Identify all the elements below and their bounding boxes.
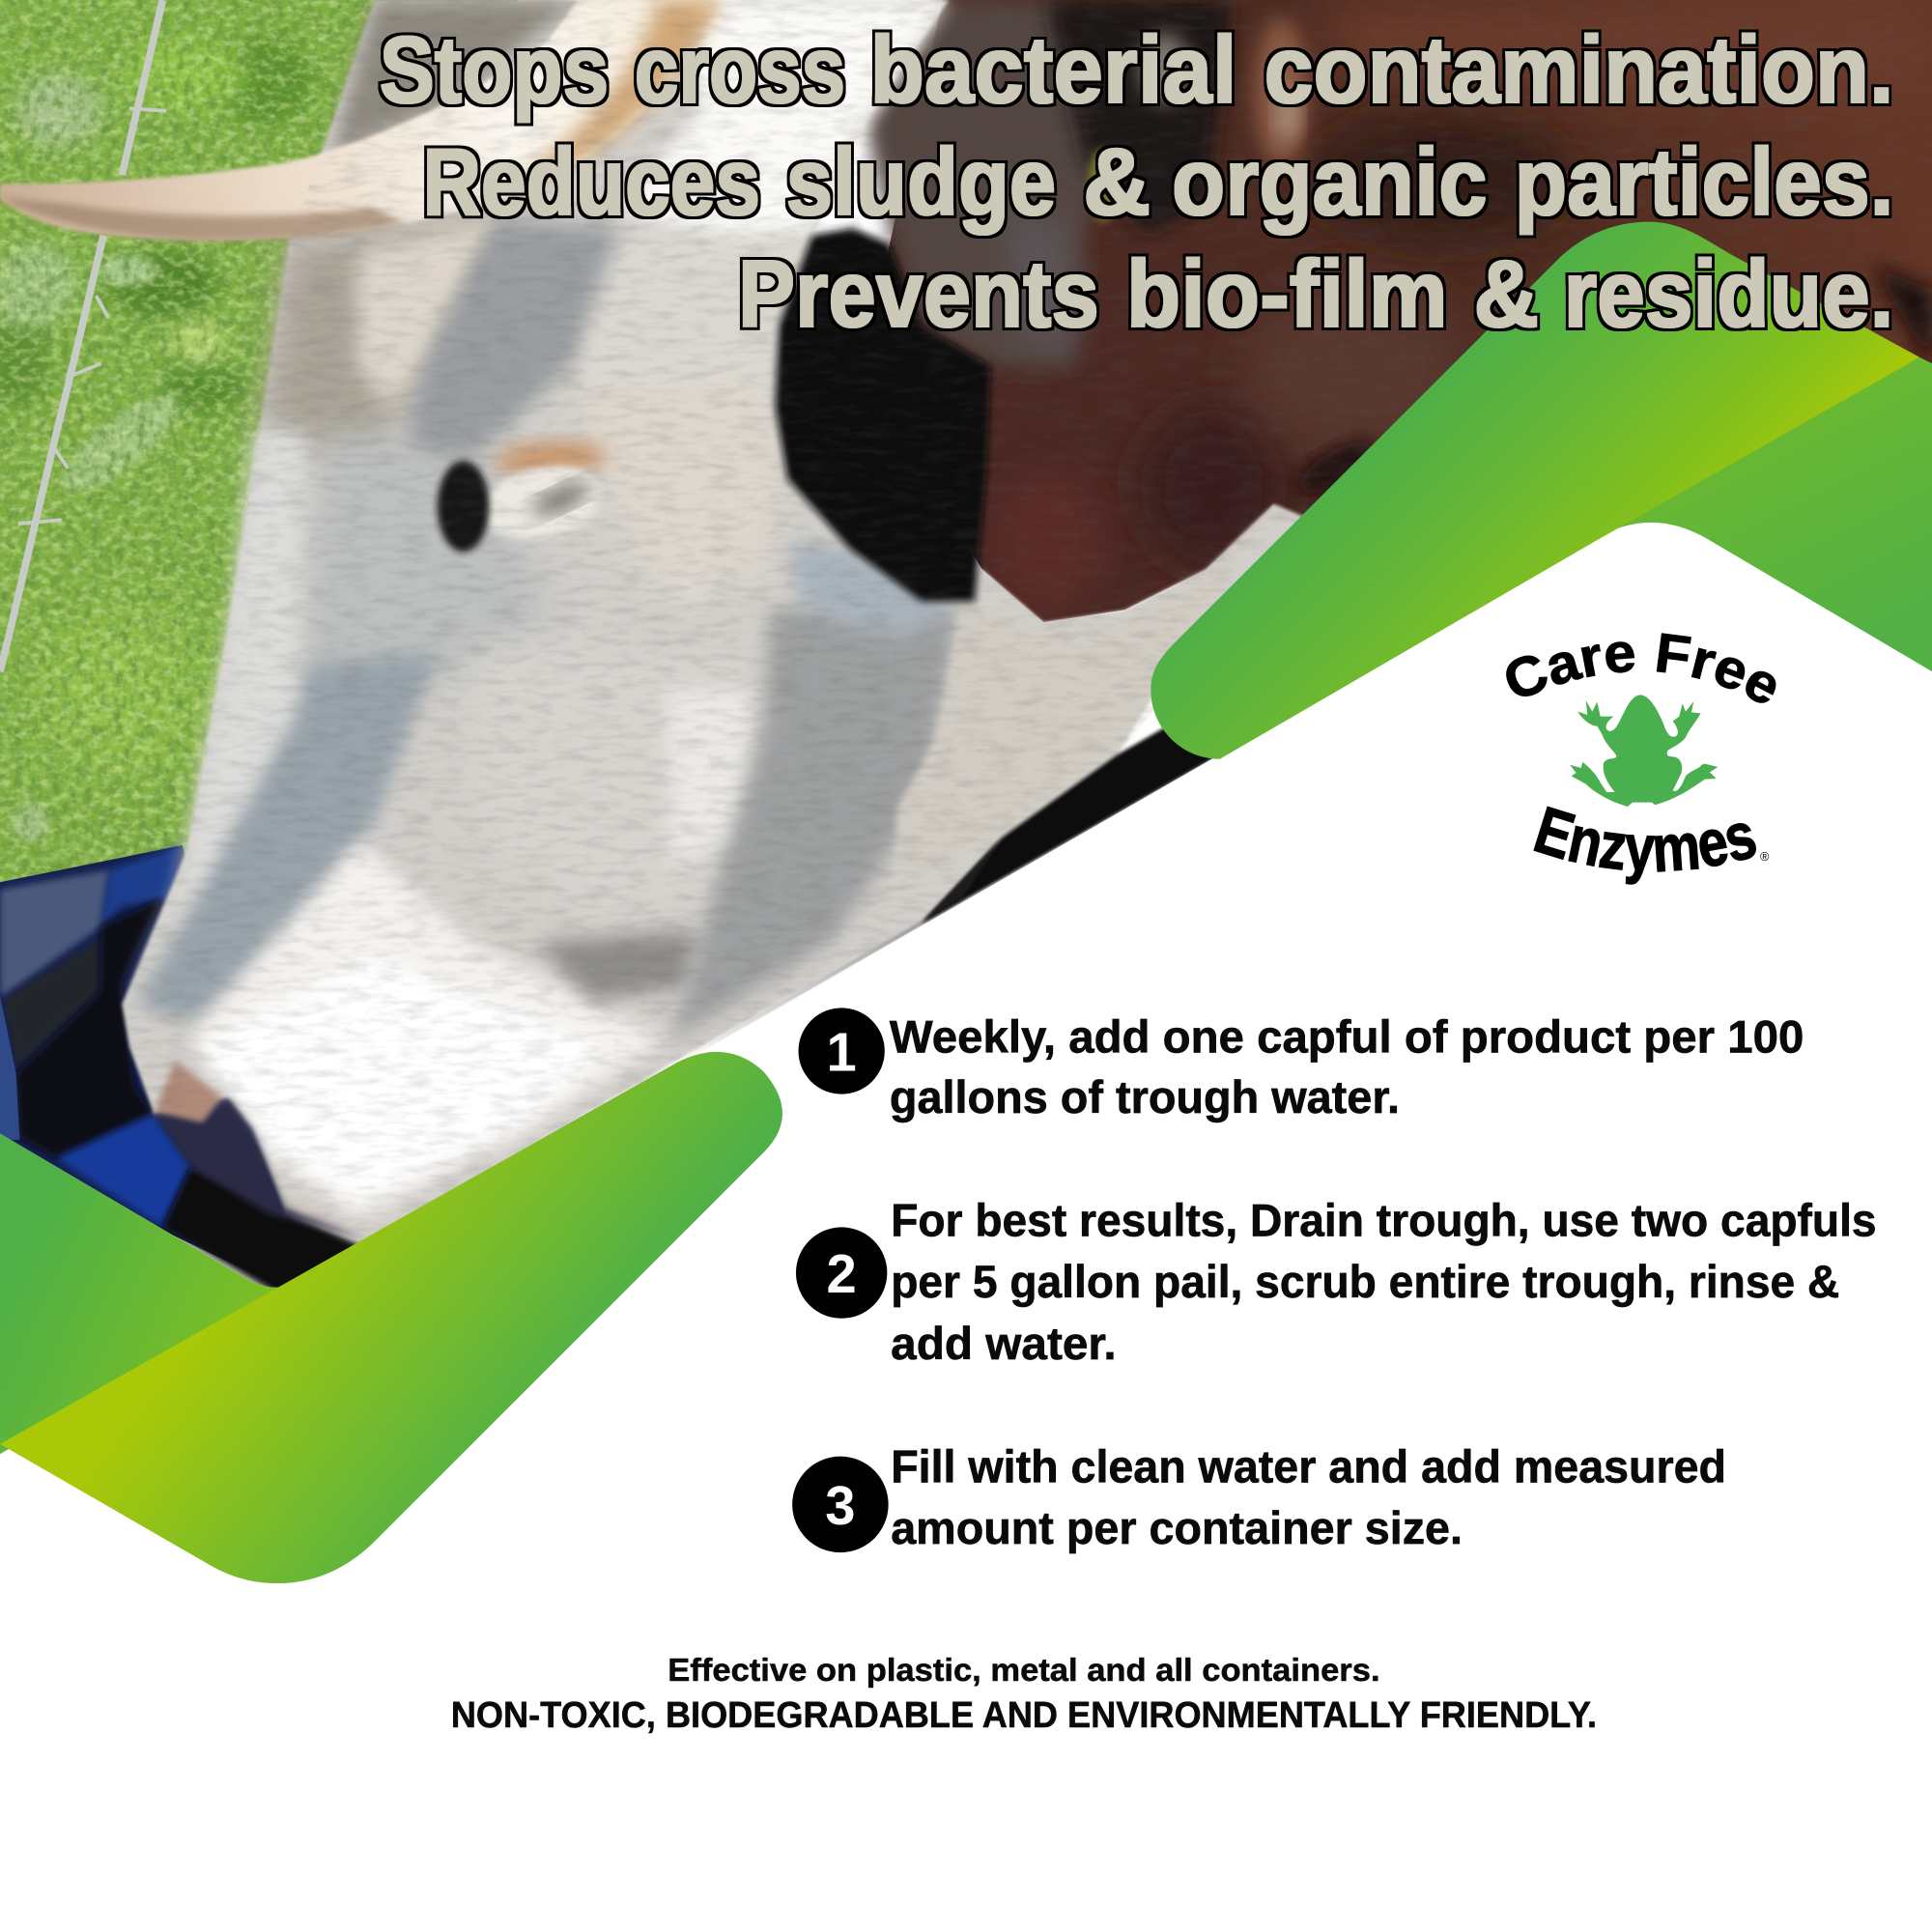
footer note: NON-TOXIC, BIODEGRADABLE AND ENVIRONMENTALLY FRIENDLY.	[451, 1694, 1597, 1736]
headline: particles.	[1515, 128, 1893, 235]
step 3 text: amount per container size.	[891, 1503, 1463, 1554]
headline: residue.	[1564, 241, 1893, 347]
step 1	[799, 1008, 1804, 1123]
logo text: Enzymes: Enzymes	[1533, 806, 1756, 885]
headline: Prevents	[738, 241, 1099, 347]
white face	[122, 0, 1306, 1244]
headline: cross	[635, 16, 845, 123]
green band: right backing	[1577, 357, 1932, 672]
green band: top right	[1151, 222, 1919, 759]
eye	[438, 440, 610, 552]
step 3 text	[891, 1441, 1726, 1554]
step 2 text: For best results, Drain trough, use two capfuls	[891, 1195, 1877, 1246]
number badge 1: 1	[827, 1021, 857, 1082]
number badge 2	[796, 1227, 887, 1319]
step 2 text: per 5 gallon pail, scrub entire trough, rinse &	[891, 1257, 1839, 1308]
step 3 text: Fill with clean water and add measured	[891, 1441, 1726, 1492]
headline: &	[1474, 241, 1539, 347]
headline: bio-film	[1126, 241, 1448, 347]
green band: bottom left front	[0, 1052, 782, 1583]
photo: cow drinking at trough	[0, 0, 1932, 1306]
number badge 2: 2	[827, 1243, 857, 1304]
step 1 text: Weekly, add one capful of product per 100	[890, 1011, 1804, 1063]
icon: frog	[1570, 695, 1718, 807]
headline	[380, 16, 1893, 347]
fur texture	[129, 0, 1735, 1231]
trough	[0, 845, 366, 1306]
headline: Stops	[380, 16, 609, 123]
black patch	[775, 228, 991, 601]
headline: Reduces	[423, 128, 760, 235]
headline: sludge	[786, 128, 1056, 235]
headline: contamination.	[1264, 16, 1893, 123]
dark neck hair	[865, 0, 1233, 370]
barbed wire	[0, 0, 166, 671]
number badge 3	[792, 1457, 889, 1552]
brown hide shading	[992, 0, 1932, 616]
white lower panel	[0, 523, 1932, 1932]
headline: &	[1083, 128, 1151, 235]
shading on face	[129, 0, 1274, 1239]
brown hide	[863, 0, 1932, 690]
green band: bottom left back	[0, 1133, 370, 1454]
grass background	[0, 0, 518, 883]
number badge 3: 3	[825, 1475, 856, 1536]
step 1 text	[890, 1011, 1804, 1123]
headline: bacterial	[870, 16, 1237, 123]
logo: Care Free Enzymes	[1506, 633, 1776, 885]
footer note: Effective on plastic, metal and all containers.	[668, 1653, 1380, 1689]
step 2 text	[891, 1195, 1877, 1370]
registered mark: ®	[1760, 850, 1770, 864]
step 2	[796, 1195, 1877, 1370]
footer note	[451, 1653, 1597, 1736]
horn	[0, 0, 719, 241]
step 3	[792, 1441, 1726, 1554]
step 1 text: gallons of trough water.	[890, 1072, 1400, 1123]
logo text: Care Free: Care Free	[1506, 633, 1776, 703]
number badge 1	[799, 1008, 885, 1094]
headline: organic	[1172, 128, 1488, 235]
step 2 text: add water.	[891, 1319, 1117, 1370]
